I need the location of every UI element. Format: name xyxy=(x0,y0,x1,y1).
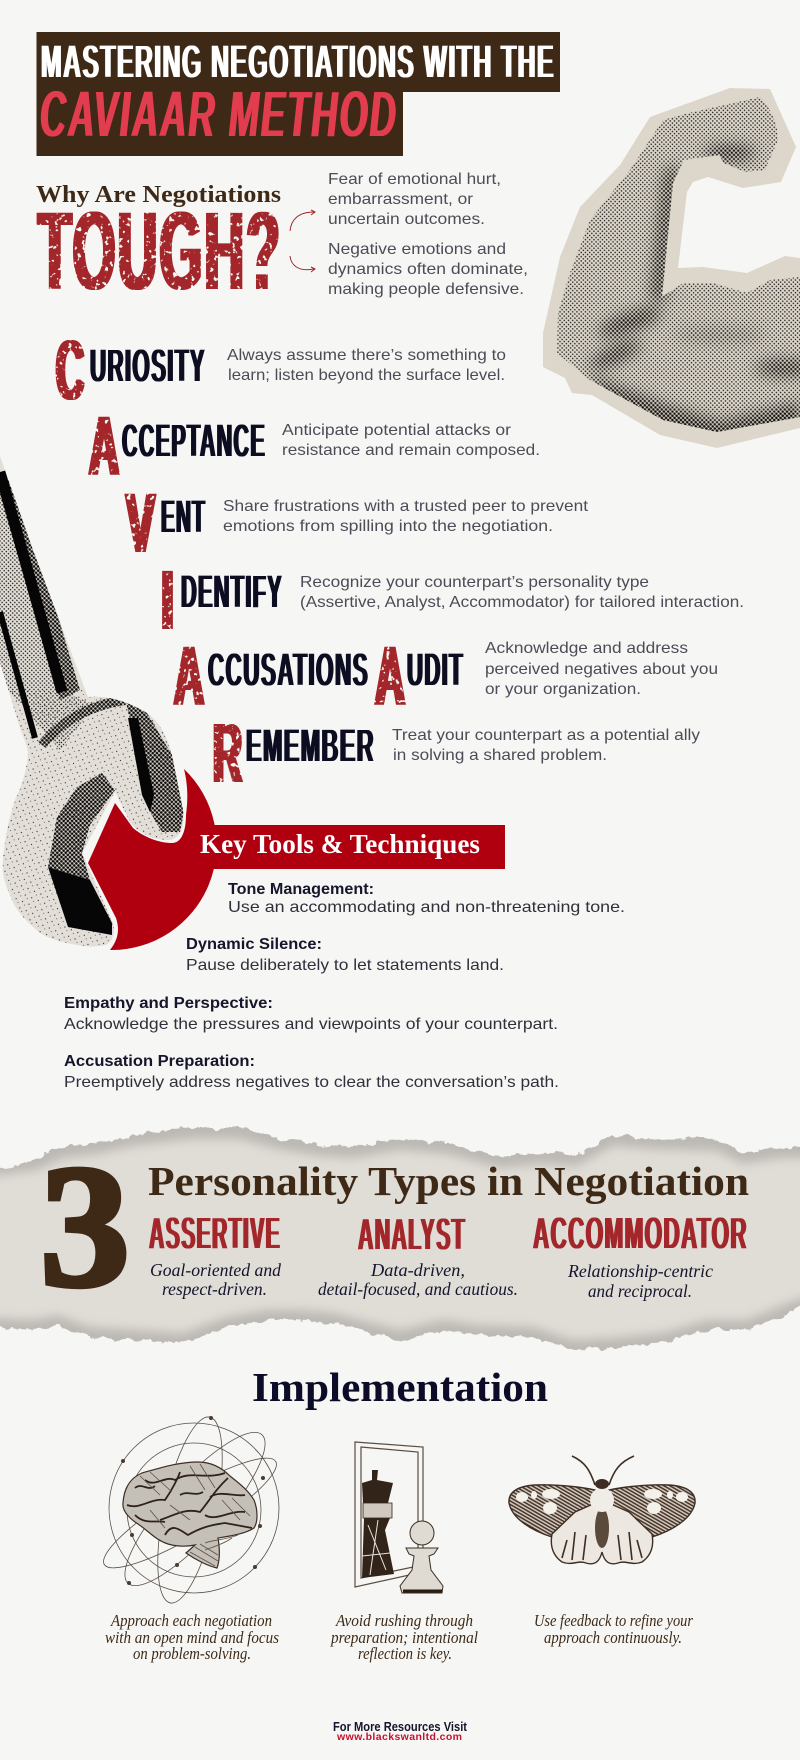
caviaar row: accusations audit: UDIT xyxy=(407,644,464,697)
caption: butterfly xyxy=(534,1611,693,1647)
banner: key tools and techniques: Key Tools & Techniques xyxy=(200,829,480,859)
banner: key tools and techniques xyxy=(200,825,505,869)
text: reasons negotiations are tough: dynamics often dominate, xyxy=(328,261,528,278)
personality type: assertive xyxy=(149,1207,281,1299)
caption: mirror: preparation; intentional xyxy=(330,1628,478,1647)
text: tools list: Acknowledge the pressures and viewpoints of your counterpart. xyxy=(64,1016,558,1033)
text: ASSERTIVE xyxy=(149,1207,281,1259)
caviaar row: identify: I xyxy=(161,553,174,647)
caption: brain: Approach each negotiation xyxy=(110,1611,272,1630)
footer: www.blackswanltd.com xyxy=(336,1731,462,1743)
text: reasons negotiations are tough: Fear of emotional hurt, xyxy=(328,171,501,188)
personality type: assertive: Goal-oriented and xyxy=(150,1260,281,1280)
caviaar row: curiosity: Always assume there’s something to xyxy=(227,347,506,364)
caviaar row: accusations audit: Acknowledge and address xyxy=(485,640,688,657)
text: tools list xyxy=(64,881,625,1091)
text: TOUGH? xyxy=(38,190,282,313)
personality type: analyst: detail-focused, and cautious. xyxy=(318,1279,518,1299)
footer xyxy=(333,1719,468,1743)
caviaar row: acceptance: A xyxy=(89,399,119,493)
text: reasons negotiations are tough: Negative emotions and xyxy=(328,241,506,258)
personality type: accommodator: and reciprocal. xyxy=(588,1281,692,1301)
personality type: analyst: Data-driven, xyxy=(370,1260,465,1280)
text: reasons negotiations are tough xyxy=(328,171,528,298)
text: tools list: Preemptively address negatives to clear the conversation’s path. xyxy=(64,1074,559,1091)
caviaar row: acceptance: resistance and remain composed. xyxy=(282,442,540,459)
caviaar row: accusations audit: CCUSATIONS xyxy=(208,644,369,697)
caption: brain: with an open mind and focus xyxy=(105,1628,279,1647)
big number three: 3 xyxy=(40,1129,130,1323)
personality type: analyst xyxy=(318,1208,518,1299)
caviaar row: vent: emotions from spilling into the negotiation. xyxy=(223,518,553,535)
title banner: CAVIAAR METHOD xyxy=(40,77,398,152)
title banner xyxy=(36,32,560,156)
text: tools list: Use an accommodating and non-threatening tone. xyxy=(228,899,625,916)
text: tools list: Pause deliberately to let statements land. xyxy=(186,957,504,974)
heading: why are negotiations tough: Why Are Negotiations xyxy=(36,181,281,208)
illustration: wrench xyxy=(0,456,184,946)
caption: butterfly: approach continuously. xyxy=(544,1628,682,1647)
personality type: accommodator: Relationship-centric xyxy=(567,1261,713,1281)
caption: mirror: Avoid rushing through xyxy=(335,1611,473,1630)
caption: brain: on problem-solving. xyxy=(133,1644,251,1663)
text: reasons negotiations are tough: uncertain outcomes. xyxy=(328,211,485,228)
caviaar row: remember: Treat your counterpart as a potential ally xyxy=(392,727,700,744)
caviaar row: identify: DENTIFY xyxy=(181,566,283,619)
caviaar row: accusations audit: or your organization. xyxy=(485,681,641,698)
footer: For More Resources Visit xyxy=(333,1719,468,1734)
heading: implementation: Implementation xyxy=(252,1364,548,1410)
icon: brain with orbits xyxy=(93,1412,287,1608)
caviaar row: acceptance xyxy=(89,399,540,493)
text: tools list: Accusation Preparation: xyxy=(64,1053,255,1070)
caption: brain xyxy=(105,1611,279,1663)
caviaar row: remember: EMEMBER xyxy=(246,720,375,773)
text: reasons negotiations are tough: making people defensive. xyxy=(328,281,524,298)
text: reasons negotiations are tough: embarrassment, or xyxy=(328,191,474,208)
icon: mirror with queen and pawn xyxy=(355,1442,443,1593)
caviaar row: accusations audit: A xyxy=(375,629,405,723)
caviaar row: curiosity xyxy=(56,323,506,417)
caviaar row: vent xyxy=(126,476,589,570)
arrows from heading to reasons xyxy=(290,210,315,272)
caption: mirror: reflection is key. xyxy=(358,1644,452,1663)
caviaar row: acceptance: Anticipate potential attacks or xyxy=(282,422,512,439)
caviaar row: vent: V xyxy=(126,476,155,570)
caviaar row: identify: Recognize your counterpart’s personality type xyxy=(300,574,649,591)
caviaar row: remember xyxy=(213,706,700,800)
caviaar row: identify: (Assertive, Analyst, Accommodator) for tailored interaction. xyxy=(300,594,744,611)
caviaar row: accusations audit: A xyxy=(174,629,204,723)
caviaar row: curiosity: URIOSITY xyxy=(90,340,206,393)
personality type: accommodator xyxy=(533,1207,748,1301)
caviaar row: identify xyxy=(161,553,744,647)
torn paper band xyxy=(0,1128,800,1350)
personality type: assertive: respect-driven. xyxy=(162,1279,267,1299)
text: tools list: Dynamic Silence: xyxy=(186,936,322,953)
personality type: analyst: ANALYST xyxy=(358,1208,466,1260)
text: tools list: Tone Management: xyxy=(228,881,374,898)
caviaar row: curiosity: learn; listen beyond the surface level. xyxy=(228,367,505,384)
text: tools list: Empathy and Perspective: xyxy=(64,995,273,1012)
caption: mirror xyxy=(330,1611,478,1663)
icon: butterfly xyxy=(509,1456,695,1564)
caviaar row: vent: Share frustrations with a trusted peer to prevent xyxy=(223,498,589,515)
red circle with wrench-shaped notch xyxy=(88,769,217,950)
caviaar row: vent: ENT xyxy=(161,491,206,544)
illustration: flexed arm xyxy=(530,80,800,450)
heading: why are negotiations tough xyxy=(36,181,282,313)
caviaar row: acceptance: CCEPTANCE xyxy=(122,415,266,468)
heading: personality types: Personality Types in Negotiation xyxy=(148,1158,749,1204)
caviaar row: accusations audit: perceived negatives about you xyxy=(485,661,718,678)
caviaar row: remember: in solving a shared problem. xyxy=(393,747,607,764)
caviaar row: remember: R xyxy=(213,706,242,800)
caption: butterfly: Use feedback to refine your xyxy=(534,1611,693,1630)
caviaar row: curiosity: C xyxy=(56,323,84,417)
caviaar row: accusations audit xyxy=(174,629,718,723)
